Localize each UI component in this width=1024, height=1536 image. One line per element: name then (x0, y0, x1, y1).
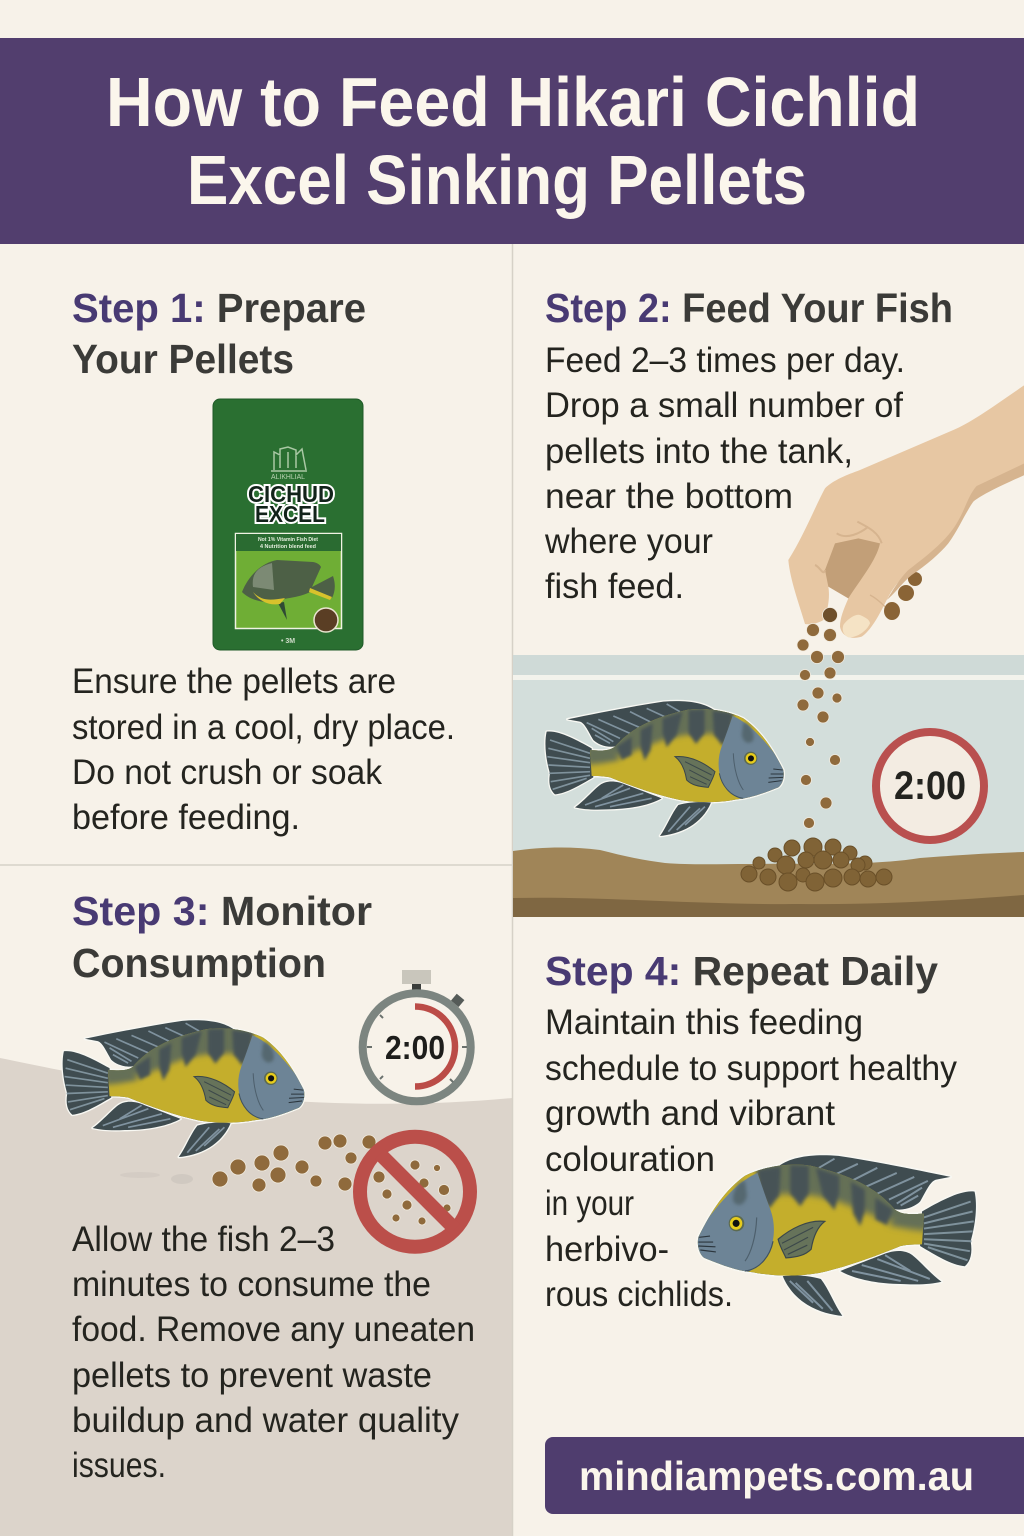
step 1 heading: Your Pellets (72, 336, 294, 382)
step 3 heading: Consumption (72, 940, 326, 986)
step 1 body text (72, 662, 455, 837)
step 3 heading: Step 3: Monitor (72, 888, 372, 934)
website footer: mindiampets.com.au (579, 1453, 974, 1499)
panel: step 3 (63, 888, 475, 1485)
step 3 body text: Allow the fish 2–3 (72, 1220, 335, 1259)
step 4 heading: Step 4: Repeat Daily (545, 948, 938, 994)
icon: no uneaten pellets sign (360, 1137, 470, 1247)
panel: step 3 sand background (0, 1058, 512, 1536)
panel: step 4 (545, 948, 1024, 1514)
step 2 heading: Step 2: Feed Your Fish (545, 285, 953, 331)
title banner: Excel Sinking Pellets (187, 141, 807, 219)
panel: step 2 (513, 285, 1024, 917)
panel: step 1 (72, 285, 455, 837)
falling pellets (797, 608, 844, 828)
step 1 heading: Step 1: Prepare (72, 285, 366, 331)
step 3 body text: minutes to consume the (72, 1265, 431, 1304)
icon: healthy fish (694, 1154, 976, 1316)
step 3 body text: buildup and water quality (72, 1401, 459, 1440)
icon: stopwatch (363, 970, 471, 1101)
step 4 body text: growth and vibrant (545, 1094, 835, 1133)
step 4 body text: in your (545, 1184, 634, 1223)
icon: pellet bag: EXCEL (255, 501, 325, 527)
icon: pellet bag: ALIKHLIAL (271, 474, 305, 481)
icon: pellet bag (213, 399, 363, 650)
pellets behind hand (884, 572, 922, 620)
scattered pellets (212, 1134, 376, 1192)
icon: pellet bag: Not 1% Vitamin Fish Diet (258, 537, 318, 543)
icon: pellet bag: 4 Nutrition blend feed (260, 544, 316, 550)
step 1 body text: before feeding. (72, 798, 300, 837)
tank water scene (513, 655, 1024, 917)
step 2 body text: fish feed. (545, 567, 684, 606)
step 2 body text: pellets into the tank, (545, 432, 853, 471)
step 1 heading (72, 285, 366, 382)
step 3 heading (72, 888, 372, 986)
icon: 2:00 timer sign: 2:00 (894, 764, 966, 808)
step 2 body text (544, 341, 905, 606)
step 1 body text: Ensure the pellets are (72, 662, 396, 701)
step 2 body text: Drop a small number of (545, 386, 903, 425)
step 3 body text: issues. (72, 1446, 166, 1485)
icon: pellet bag: CICHUD (248, 481, 334, 507)
icon: pellet bag: • 3M (281, 638, 295, 645)
step 4 body text: schedule to support healthy (545, 1049, 957, 1088)
panel dividers (0, 244, 512, 1536)
step 2 body text: where your (544, 522, 713, 561)
step 4 body text (545, 1003, 957, 1314)
step 1 body text: stored in a cool, dry place. (72, 708, 455, 747)
icon: fish in tank (545, 700, 787, 836)
icon: stopwatch: 2:00 (385, 1029, 445, 1066)
icon: 2:00 timer sign (876, 732, 984, 840)
icon: hand dropping pellets (788, 383, 1024, 638)
step 3 body text (72, 1220, 475, 1485)
title banner (0, 38, 1024, 244)
step 3 body text: pellets to prevent waste (72, 1356, 432, 1395)
step 4 body text: Maintain this feeding (545, 1003, 863, 1042)
website footer (545, 1437, 1024, 1514)
step 2 body text: Feed 2–3 times per day. (545, 341, 905, 380)
step 3 body text: food. Remove any uneaten (72, 1310, 475, 1349)
pellet pile (741, 838, 892, 891)
title banner: How to Feed Hikari Cichlid (106, 63, 920, 141)
step 4 body text: colouration (545, 1140, 715, 1179)
step 4 body text: rous cichlids. (545, 1275, 733, 1314)
icon: fish eating (63, 1019, 307, 1157)
step 4 body text: herbivo- (545, 1230, 669, 1269)
step 2 body text: near the bottom (545, 477, 793, 516)
step 1 body text: Do not crush or soak (72, 753, 382, 792)
